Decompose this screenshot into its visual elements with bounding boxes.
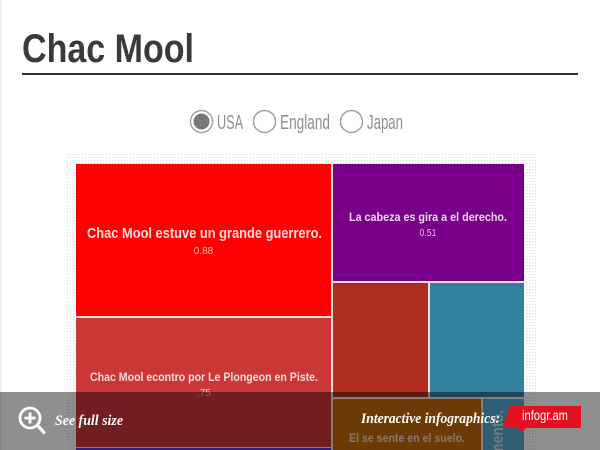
radio: England — [254, 110, 276, 132]
cell heading: El se sente en el suelo. — [349, 431, 465, 445]
radio selector — [190, 110, 403, 134]
title rule — [22, 73, 578, 75]
label: USA: USA — [217, 112, 243, 134]
radio: USA — [190, 110, 212, 132]
cell: narrow teal — [483, 399, 524, 450]
dotted chart background — [66, 153, 536, 450]
cell value: 0.88 — [194, 246, 214, 257]
cell: dark red — [333, 283, 428, 397]
infogr.am badge — [503, 406, 581, 432]
bottom overlay bar — [0, 392, 600, 450]
title: Chac Mool — [22, 27, 194, 71]
cell value: .75 — [197, 388, 211, 399]
badge label: infogr.am — [522, 407, 568, 423]
cell: Chac Mool estuve un grande guerrero — [76, 164, 331, 316]
cell heading: Chac Mool estuve un grande guerrero. — [87, 225, 322, 242]
cell: La cabeza es gira a el derecho — [333, 164, 524, 281]
icon: magnifier — [20, 408, 44, 432]
label: Japan: Japan — [367, 112, 403, 134]
cell value: 0.51 — [420, 228, 437, 239]
cell heading: Chac Mool econtro por Le Plongeon en Piste. — [90, 370, 318, 384]
label: England: England — [280, 112, 330, 134]
cell: Chac Mool econtro por Le Plongeon en Piste — [76, 318, 331, 447]
see full size link: See full size — [55, 413, 123, 429]
cell: teal — [430, 283, 524, 397]
radio: Japan — [340, 110, 362, 132]
cell: El se sente en el suelo — [333, 399, 481, 450]
cell heading: La cabeza es gira a el derecho. — [349, 210, 507, 224]
treemap — [76, 164, 524, 450]
interactive infographics text: Interactive infographics: — [360, 411, 500, 427]
cell: bottom navy — [76, 448, 331, 450]
